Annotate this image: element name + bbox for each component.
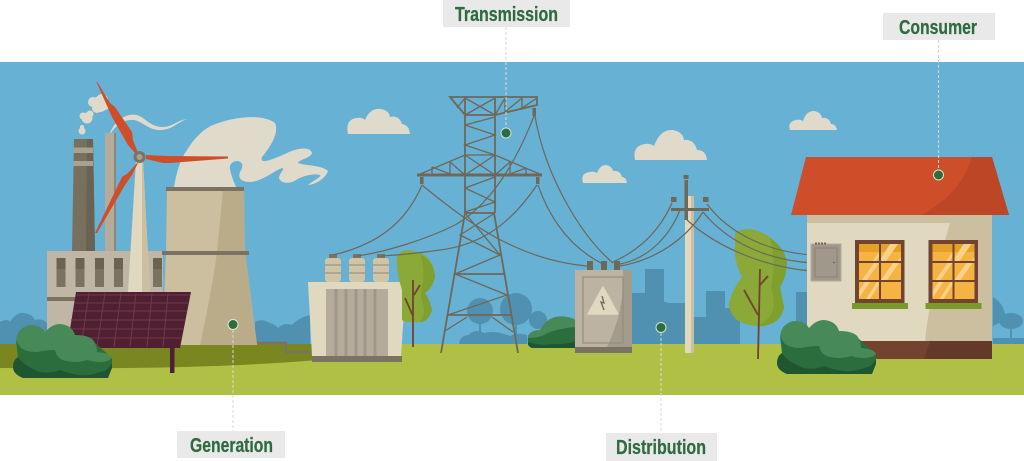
callout: Distribution: Distribution	[616, 437, 706, 459]
tree: right	[729, 229, 787, 359]
callout: Distribution	[606, 322, 717, 461]
bush: centre	[528, 316, 576, 348]
window: right	[928, 240, 978, 303]
window sill: left	[852, 303, 908, 309]
step-up transformer	[308, 254, 406, 362]
smoke puffs	[78, 94, 110, 134]
insulators on tower	[420, 108, 540, 184]
bush: left	[13, 324, 112, 378]
callout: Consumer	[883, 13, 995, 180]
cooling tower	[162, 187, 257, 345]
clouds	[347, 109, 837, 183]
callout: Consumer: Consumer	[899, 17, 977, 39]
wind turbine	[95, 81, 228, 292]
ground	[0, 344, 1024, 395]
solar panel	[67, 292, 191, 373]
callout: Transmission: Transmission	[455, 4, 558, 26]
window: left	[855, 240, 904, 303]
pipe	[257, 343, 312, 352]
callout: Generation: Generation	[190, 435, 273, 457]
power lines	[333, 116, 812, 271]
house	[791, 157, 1009, 359]
bush: right	[777, 320, 876, 374]
olive field	[0, 344, 318, 368]
distribution transformer	[575, 261, 632, 353]
electric meter box	[811, 244, 841, 281]
callout: Transmission	[443, 0, 570, 138]
callout: Generation	[177, 320, 285, 458]
background trees and city skyline	[0, 269, 1024, 345]
transmission tower	[417, 97, 542, 353]
chimney: tall	[72, 139, 95, 251]
chimney: slim	[105, 133, 116, 251]
window sill: right	[926, 303, 982, 309]
utility pole	[671, 175, 709, 353]
plume	[174, 117, 328, 187]
tree: middle	[397, 250, 435, 347]
sky background	[0, 62, 1024, 352]
wisp	[110, 115, 187, 133]
power plant building	[47, 251, 163, 345]
